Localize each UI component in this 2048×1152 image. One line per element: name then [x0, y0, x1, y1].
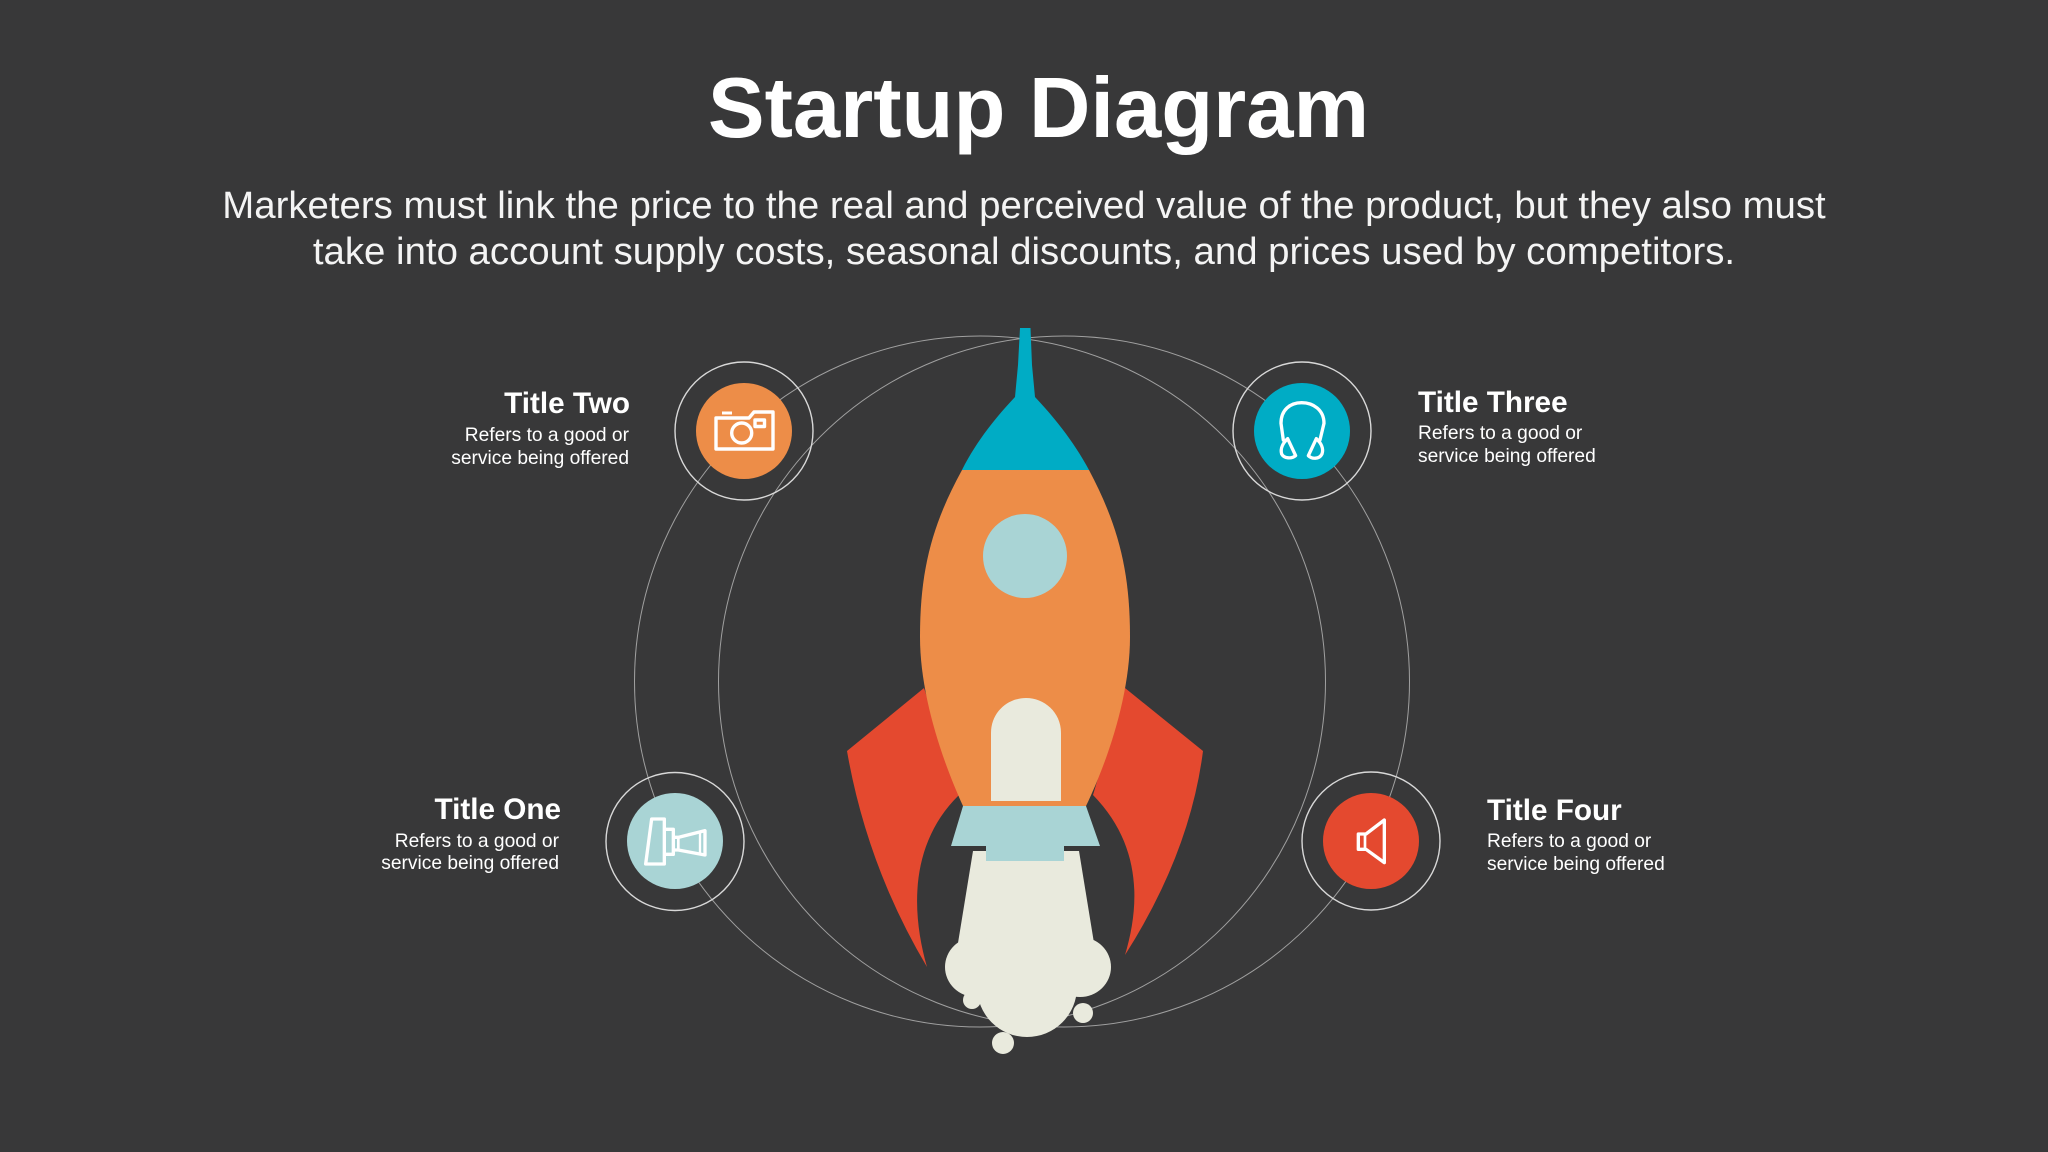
- nose cone: [962, 328, 1089, 470]
- subtitle text block: Marketers must link the price to the real and perceived value of the product, but they also must: [222, 184, 1826, 227]
- label: Title Three: Refers to a good or: [1418, 423, 1583, 444]
- porthole: [983, 514, 1067, 598]
- label: Title One: Title One: [435, 793, 561, 826]
- label: Title Three: Title Three: [1418, 386, 1568, 419]
- label: Title Two: Title Two: [504, 387, 630, 420]
- node: headphones: [1233, 362, 1371, 500]
- label: Title Two: [451, 387, 630, 469]
- orbit rings: [634, 336, 1410, 1027]
- node: speaker: [1302, 772, 1440, 910]
- label: Title Four: Title Four: [1487, 794, 1622, 827]
- icon: camera: [716, 412, 773, 449]
- rocket: [847, 328, 1203, 1054]
- label: Title Four: service being offered: [1487, 854, 1665, 875]
- node: camera: [675, 362, 813, 500]
- subtitle text block: [222, 184, 1826, 273]
- smoke plume: [945, 851, 1111, 1054]
- label: Title Three: service being offered: [1418, 446, 1596, 467]
- label: Title Four: Refers to a good or: [1487, 831, 1652, 852]
- left fin: [847, 688, 959, 967]
- door: [991, 698, 1061, 801]
- node: telescope: [606, 772, 744, 910]
- icon: speaker: [1358, 820, 1384, 863]
- icon: telescope: [646, 819, 705, 864]
- icon: headphones: [1281, 403, 1324, 458]
- label: Title Two: Refers to a good or: [465, 425, 630, 446]
- title: Startup Diagram: [708, 61, 1369, 156]
- nozzle: [951, 806, 1100, 861]
- rocket body: [920, 470, 1130, 806]
- label: Title Three: [1418, 386, 1596, 467]
- subtitle text block: take into account supply costs, seasonal discounts, and prices used by competitors.: [313, 230, 1735, 273]
- label: Title Two: service being offered: [451, 448, 629, 469]
- label: Title One: [381, 793, 561, 874]
- label: Title One: Refers to a good or: [395, 831, 560, 852]
- right fin: [1093, 688, 1203, 955]
- label: Title One: service being offered: [381, 853, 559, 874]
- label: Title Four: [1487, 794, 1665, 875]
